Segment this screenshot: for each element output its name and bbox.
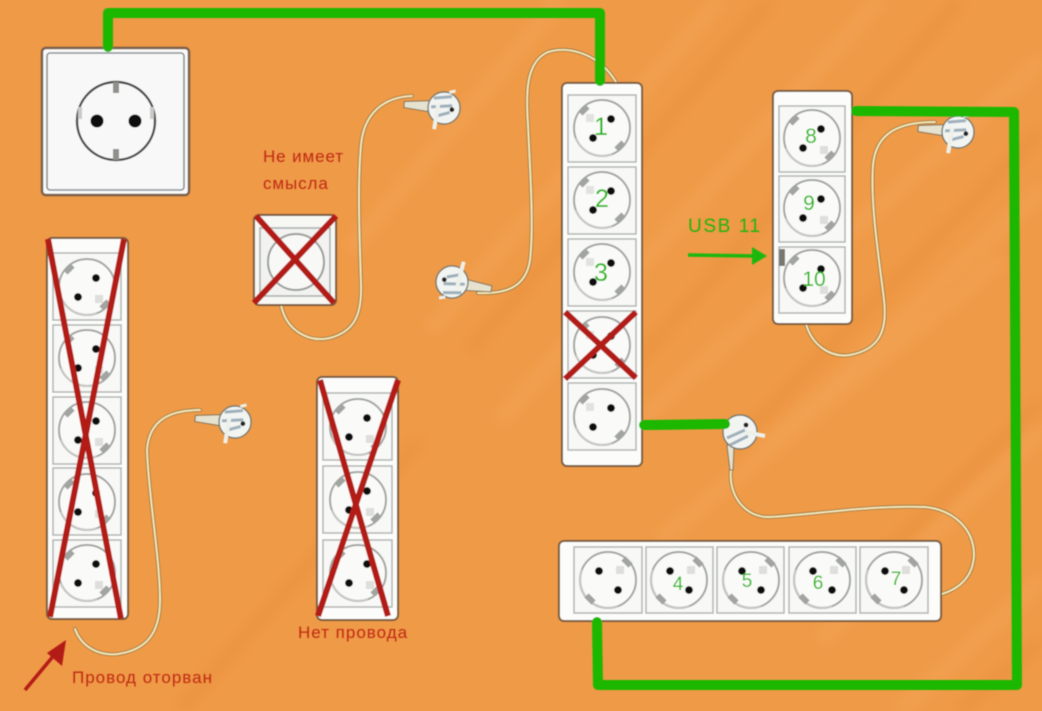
- socket numbers: 1: [594, 113, 608, 141]
- middle power strip: [317, 377, 398, 620]
- crossed out strip: [318, 380, 398, 616]
- bottom power strip: [559, 541, 941, 621]
- socket numbers: [673, 569, 901, 595]
- cord and plug: small socket: [281, 87, 462, 339]
- cord and plug: left strip, torn: [75, 401, 253, 654]
- socket numbers: 9: [803, 192, 815, 215]
- socket numbers: 10: [802, 268, 826, 291]
- arrow: USB: [688, 247, 767, 265]
- cord and plug: central strip: [433, 50, 616, 307]
- socket numbers: [802, 125, 826, 291]
- socket numbers: 2: [595, 185, 609, 213]
- socket numbers: 7: [891, 569, 901, 590]
- arrow: torn wire: [25, 640, 66, 690]
- USB label: USB 11: [688, 216, 762, 237]
- crossed out strip: [48, 239, 124, 619]
- socket numbers: 5: [742, 571, 752, 592]
- socket numbers: [594, 113, 609, 287]
- socket numbers: 3: [594, 259, 608, 287]
- label: no sense: Не имеет: [263, 147, 344, 166]
- disabled single socket: [254, 215, 336, 305]
- label: wire torn off: Провод оторван: [72, 668, 213, 687]
- cord and plug: bottom strip: [723, 415, 974, 594]
- central power strip: [562, 83, 642, 466]
- label: no sense: смысла: [263, 174, 329, 193]
- crossed out socket: [565, 312, 636, 379]
- label: no wire: Нет провода: [298, 623, 408, 642]
- left power strip: [47, 238, 128, 619]
- socket numbers: 4: [673, 574, 684, 595]
- socket numbers: 8: [805, 125, 817, 148]
- green wire: central strip to bottom strip plug: [644, 424, 725, 425]
- label: no sense: [263, 147, 344, 193]
- green wire: right strip to bottom strip: [597, 111, 1017, 685]
- cord and plug: right strip: [806, 111, 976, 355]
- right power strip: [773, 91, 852, 324]
- socket numbers: 6: [813, 573, 823, 594]
- green wire: wall socket to central strip: [108, 13, 600, 81]
- wall socket: [42, 48, 189, 195]
